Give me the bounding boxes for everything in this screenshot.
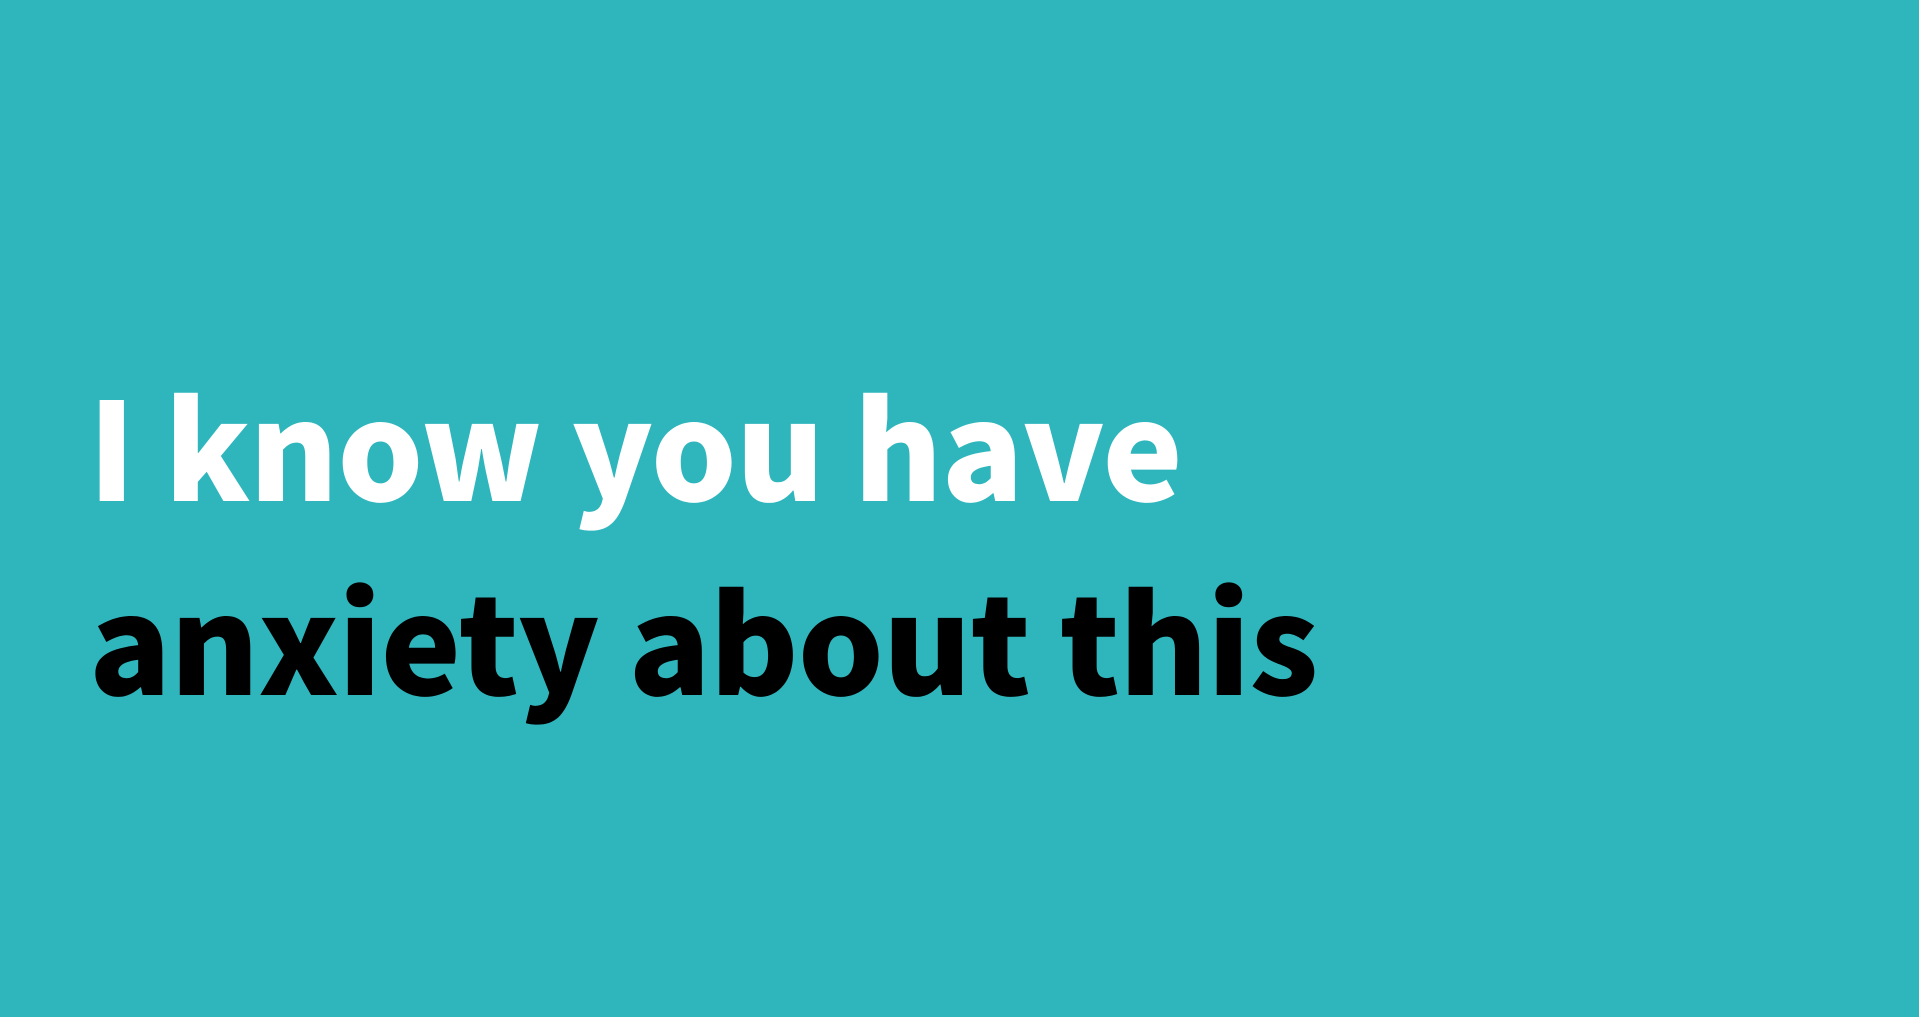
heading line 1: white: I know you have [88, 345, 1182, 541]
title text block [88, 345, 1317, 735]
heading line 2: black: anxiety about this [89, 539, 1317, 735]
